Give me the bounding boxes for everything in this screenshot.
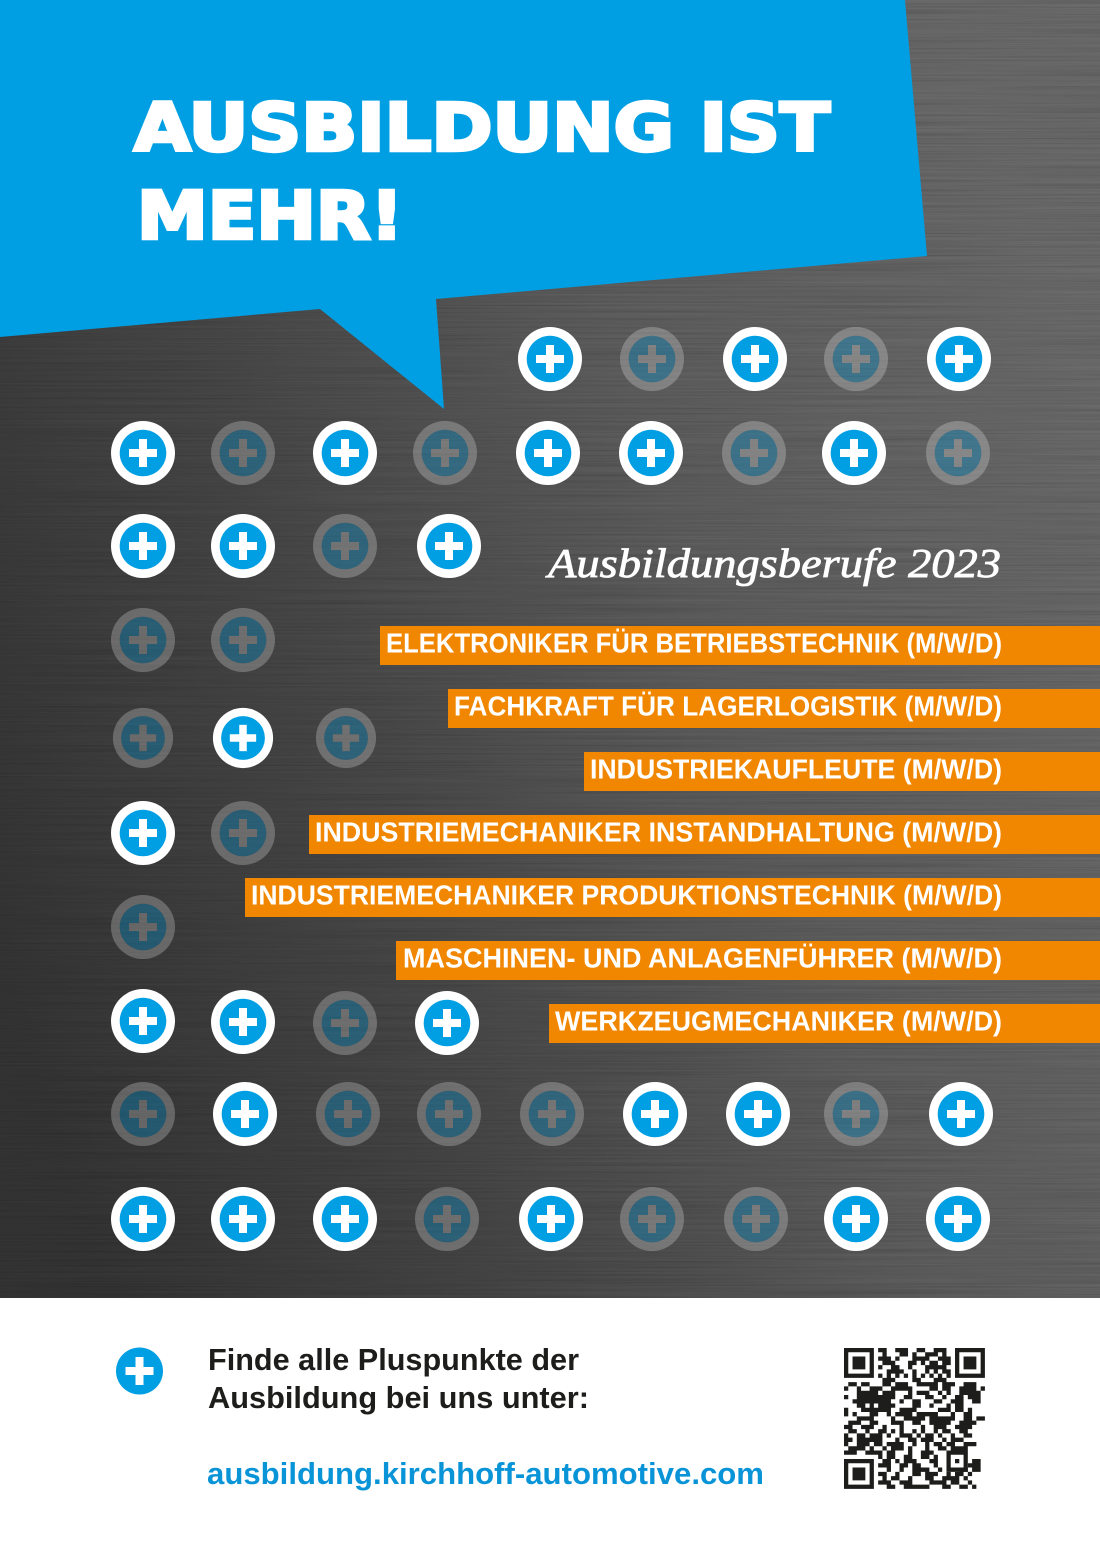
- row 9: [111, 1082, 993, 1146]
- job: Maschinen- und Anlagenführer: MASCHINEN- UND ANLAGENFÜHRER (M/W/D): [403, 942, 1002, 974]
- row 10: [111, 1187, 990, 1251]
- job list: [245, 626, 1100, 1043]
- footer panel: [0, 1298, 1100, 1556]
- row 3: [111, 514, 481, 578]
- qr finder bottom left: [844, 1459, 874, 1489]
- job: Fachkraft: FACHKRAFT FÜR LAGERLOGISTIK (M/W/D): [454, 690, 1002, 722]
- job: Industriekaufleute: [584, 752, 1100, 791]
- footer text: Ausbildung bei uns unter:: [208, 1380, 589, 1415]
- row 6: [111, 801, 275, 865]
- icon: plus: [116, 1348, 163, 1394]
- row 4: [111, 608, 275, 672]
- subheading: Ausbildungsberufe 2023: Ausbildungsberufe 2023: [545, 540, 1001, 586]
- job: Industriemechaniker Produktionstechnik: INDUSTRIEMECHANIKER PRODUKTIONSTECHNIK (M/W/D): [251, 880, 1002, 910]
- job: Industriekaufleute: INDUSTRIEKAUFLEUTE (M/W/D): [590, 754, 1002, 784]
- job: Maschinen- und Anlagenführer: [396, 941, 1100, 980]
- row 2: [111, 421, 990, 485]
- job: Industriemechaniker Instandhaltung: INDUSTRIEMECHANIKER INSTANDHALTUNG (M/W/D): [315, 816, 1002, 848]
- row 7: [111, 895, 175, 959]
- screw grid: [111, 327, 993, 1251]
- footer text: Finde alle Pluspunkte der: [208, 1342, 579, 1377]
- speech bubble: [0, 0, 927, 409]
- qr code: [844, 1348, 985, 1489]
- title: AUSBILDUNG IST: [134, 89, 830, 166]
- footer text: [208, 1342, 589, 1415]
- row 1: [518, 327, 991, 391]
- title: [134, 89, 830, 254]
- row 5: [113, 708, 376, 768]
- row 8: [111, 989, 479, 1055]
- qr alignment: [946, 1450, 968, 1472]
- qr finder top right: [955, 1348, 985, 1378]
- job: Werkzeugmechaniker: WERKZEUGMECHANIKER (M/W/D): [555, 1006, 1002, 1036]
- qr finder top left: [844, 1348, 874, 1378]
- url: ausbildung.kirchhoff-automotive.com: [207, 1456, 764, 1491]
- title: MEHR!: [137, 177, 403, 254]
- job: Elektroniker: ELEKTRONIKER FÜR BETRIEBSTECHNIK (M/W/D): [386, 628, 1002, 658]
- job: Werkzeugmechaniker: [549, 1004, 1100, 1043]
